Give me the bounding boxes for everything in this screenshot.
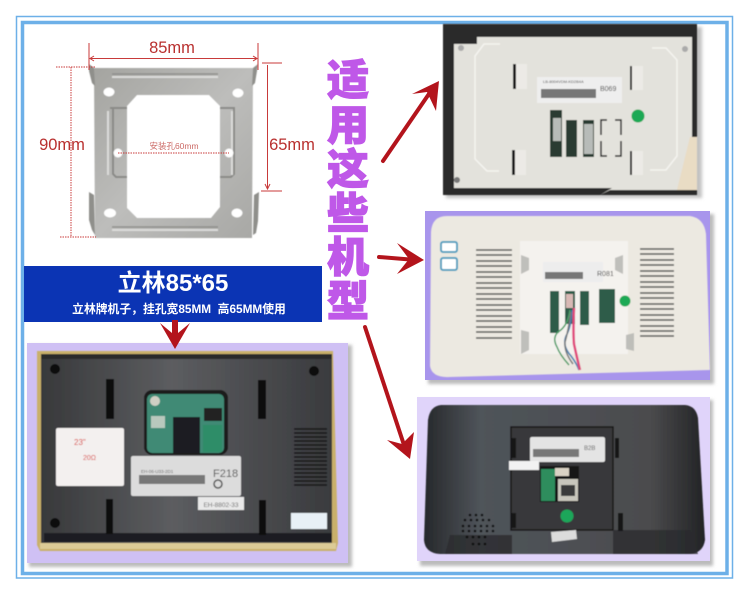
dimension line: height 90mm: 90mm: [39, 136, 85, 154]
vertical heading: applicable models: 机: [327, 234, 369, 281]
dimension line: mounting hole 60mm: [118, 141, 229, 153]
product label: [530, 437, 605, 462]
heading: model: 立林85*65: [118, 270, 228, 297]
product label: [543, 262, 614, 282]
dimension line: width 85mm: 85mm: [149, 39, 195, 57]
vertical heading: applicable models: 些: [327, 190, 369, 237]
product label: LB-8004VDM-KD2B4A: [543, 79, 584, 84]
dimension line: width 85mm: [89, 39, 258, 70]
product label: F218: [213, 468, 238, 480]
arrow: to top-right model: [383, 81, 439, 161]
product label: [537, 77, 622, 103]
vertical heading: applicable models: 适: [327, 57, 369, 104]
vertical heading: applicable models: 型: [327, 278, 369, 325]
dimension line: height 90mm: [39, 67, 96, 237]
vertical heading: applicable models: 用: [327, 102, 369, 149]
product label: [131, 456, 241, 496]
dimension line: height 65mm: [261, 63, 315, 191]
panel: top-right white device photo: [443, 24, 702, 198]
panel: bottom-right black device photo: [417, 397, 713, 566]
product label: R081: [597, 271, 614, 278]
banner: brand title: [24, 266, 322, 322]
dimension line: height 65mm: 65mm: [269, 136, 315, 154]
panel: bracket with dimensions: [39, 39, 315, 238]
panel: bottom-left black device photo: [27, 343, 352, 567]
arrow: to bottom-right model: [365, 327, 414, 459]
arrow: banner to bottom-left photo: [160, 320, 190, 349]
banner subtitle: 立林牌机子，挂孔宽85MM 高65MM使用: [72, 302, 286, 316]
model tag: EH-8802-33: [203, 502, 239, 509]
product label: EH-06-U33-2D1: [141, 469, 174, 474]
product label: B069: [600, 86, 616, 93]
vertical heading: applicable models: 这: [327, 146, 369, 193]
model tag: [198, 497, 244, 510]
dimension line: mounting hole 60mm: 安装孔60mm: [149, 141, 199, 151]
white sticker: [56, 428, 124, 486]
product label: B2B: [584, 446, 595, 452]
icon: metal mounting bracket: [89, 64, 259, 238]
vertical heading: applicable models: [327, 57, 369, 325]
white sticker: 23": [74, 438, 86, 447]
panel: middle-right white device photo: [425, 211, 714, 384]
white sticker: 20Ω: [83, 455, 96, 462]
arrow: to middle-right model: [379, 243, 424, 274]
